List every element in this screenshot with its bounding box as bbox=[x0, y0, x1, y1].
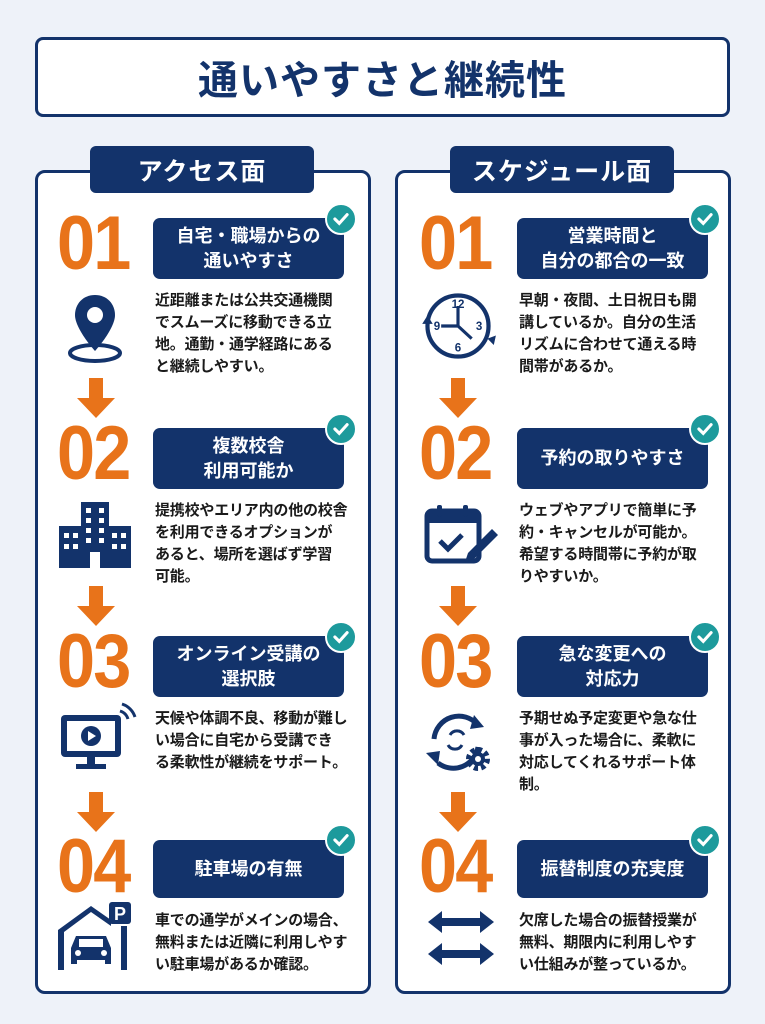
icon: clock: 6 bbox=[455, 342, 462, 354]
description bbox=[519, 292, 697, 375]
description: い仕組みが整っているか。 bbox=[519, 956, 696, 973]
description: 約・キャンセルが可能か。 bbox=[519, 524, 696, 541]
icon: parking garage bbox=[58, 902, 131, 970]
icon: clock bbox=[422, 293, 496, 359]
title box: 利用可能か bbox=[204, 460, 294, 480]
tab: schedule heading bbox=[450, 146, 674, 193]
number 03: 03 bbox=[57, 619, 129, 704]
title box bbox=[153, 840, 344, 898]
number 04: 04 bbox=[57, 824, 129, 909]
tab: access heading: アクセス面 bbox=[138, 158, 266, 186]
icon: sync gear bbox=[426, 714, 490, 771]
description: りやすいか。 bbox=[519, 568, 608, 585]
right item 03 bbox=[419, 619, 719, 793]
check icon bbox=[689, 203, 721, 235]
panel: schedule bbox=[395, 170, 731, 994]
description: 希望する時間帯に予約が取 bbox=[519, 546, 697, 563]
description: 対応してくれるサポート体 bbox=[519, 754, 696, 771]
description: ウェブやアプリで簡単に予 bbox=[519, 502, 697, 519]
title box: 振替制度の充実度 bbox=[540, 858, 684, 878]
check icon bbox=[325, 413, 357, 445]
right item 02 bbox=[419, 411, 719, 585]
check icon bbox=[689, 413, 721, 445]
left item 04 bbox=[57, 824, 355, 973]
description: リズムに合わせて通える時 bbox=[519, 336, 696, 353]
title box: 予約の取りやすさ bbox=[540, 448, 684, 468]
title box bbox=[153, 428, 344, 489]
description bbox=[519, 710, 697, 793]
description: る柔軟性が継続をサポート。 bbox=[155, 754, 347, 771]
title box: 駐車場の有無 bbox=[194, 858, 302, 878]
description bbox=[155, 292, 333, 375]
description bbox=[519, 912, 697, 973]
check icon bbox=[689, 621, 721, 653]
tab: schedule heading: スケジュール面 bbox=[472, 158, 652, 186]
description: を利用できるオプションが bbox=[155, 524, 332, 541]
description: 制。 bbox=[519, 776, 549, 793]
number 04: 04 bbox=[419, 824, 491, 909]
title box: 自宅・職場からの bbox=[176, 226, 320, 246]
icon: clock: 3 bbox=[476, 321, 483, 333]
arrow bbox=[439, 586, 477, 626]
check icon bbox=[325, 824, 357, 856]
icon: monitor bbox=[61, 702, 136, 769]
check icon bbox=[325, 621, 357, 653]
icon: clock: 12 bbox=[452, 299, 464, 311]
arrow bbox=[77, 792, 115, 832]
check icon bbox=[689, 824, 721, 856]
title box bbox=[517, 636, 708, 697]
right item 01 bbox=[419, 201, 719, 375]
title box: 対応力 bbox=[586, 668, 640, 688]
title box: 自分の都合の一致 bbox=[540, 250, 684, 270]
title box: 複数校舎 bbox=[212, 436, 284, 456]
description: 可能。 bbox=[155, 568, 199, 585]
title box: 通いやすさ bbox=[204, 250, 294, 270]
number 02: 02 bbox=[419, 411, 491, 496]
icon: clock: 9 bbox=[434, 321, 440, 333]
arrow bbox=[77, 378, 115, 418]
description: 車での通学がメインの場合、 bbox=[155, 912, 347, 929]
description: 予期せぬ予定変更や急な仕 bbox=[519, 710, 697, 727]
title: 通いやすさと継続性 bbox=[198, 59, 567, 103]
description: 講しているか。自分の生活 bbox=[519, 314, 696, 331]
title box bbox=[517, 840, 708, 898]
number 03: 03 bbox=[419, 619, 491, 704]
description: 近距離または公共交通機関 bbox=[155, 292, 333, 309]
title box bbox=[517, 428, 708, 489]
description: 間帯があるか。 bbox=[519, 358, 622, 375]
description: 提携校やエリア内の他の校舎 bbox=[155, 502, 347, 519]
description: でスムーズに移動できる立 bbox=[155, 314, 332, 331]
description bbox=[155, 710, 347, 771]
left item 03 bbox=[57, 619, 355, 771]
title box bbox=[517, 218, 708, 279]
description: 事が入った場合に、柔軟に bbox=[519, 732, 696, 749]
right item 04 bbox=[419, 824, 719, 973]
title box: 急な変更への bbox=[558, 644, 666, 664]
description: と継続しやすい。 bbox=[155, 358, 273, 375]
title box bbox=[153, 218, 344, 279]
title box: 選択肢 bbox=[222, 668, 276, 688]
panel: access bbox=[35, 170, 371, 994]
description: 無料または近隣に利用しやす bbox=[155, 934, 347, 951]
arrow bbox=[439, 378, 477, 418]
number 01: 01 bbox=[57, 201, 129, 286]
description bbox=[155, 912, 347, 973]
arrow bbox=[77, 586, 115, 626]
title bbox=[35, 37, 730, 117]
arrow bbox=[439, 792, 477, 832]
title box bbox=[153, 636, 344, 697]
title box: オンライン受講の bbox=[176, 644, 320, 664]
description bbox=[155, 502, 348, 585]
check icon bbox=[325, 203, 357, 235]
description: 天候や体調不良、移動が難し bbox=[155, 710, 347, 727]
title box: 営業時間と bbox=[568, 226, 658, 246]
icon: map pin bbox=[68, 295, 122, 363]
description bbox=[519, 502, 697, 585]
tab: access heading bbox=[90, 146, 314, 193]
number 02: 02 bbox=[57, 411, 129, 496]
left item 01 bbox=[57, 201, 355, 375]
number 01: 01 bbox=[419, 201, 491, 286]
description: 欠席した場合の振替授業が bbox=[519, 912, 697, 929]
description: い場合に自宅から受講でき bbox=[155, 732, 333, 749]
left item 02 bbox=[57, 411, 355, 585]
description: 早朝・夜間、土日祝日も開 bbox=[519, 292, 697, 309]
description: い駐車場があるか確認。 bbox=[155, 956, 318, 973]
description: 地。通勤・通学経路にある bbox=[155, 336, 333, 353]
icon: parking garage: P bbox=[114, 904, 126, 924]
description: 無料、期限内に利用しやす bbox=[519, 934, 696, 951]
icon: swap arrows bbox=[428, 911, 494, 965]
icon: calendar with pencil bbox=[424, 505, 498, 564]
description: あると、場所を選ばず学習 bbox=[155, 546, 332, 563]
icon: buildings bbox=[59, 502, 131, 568]
